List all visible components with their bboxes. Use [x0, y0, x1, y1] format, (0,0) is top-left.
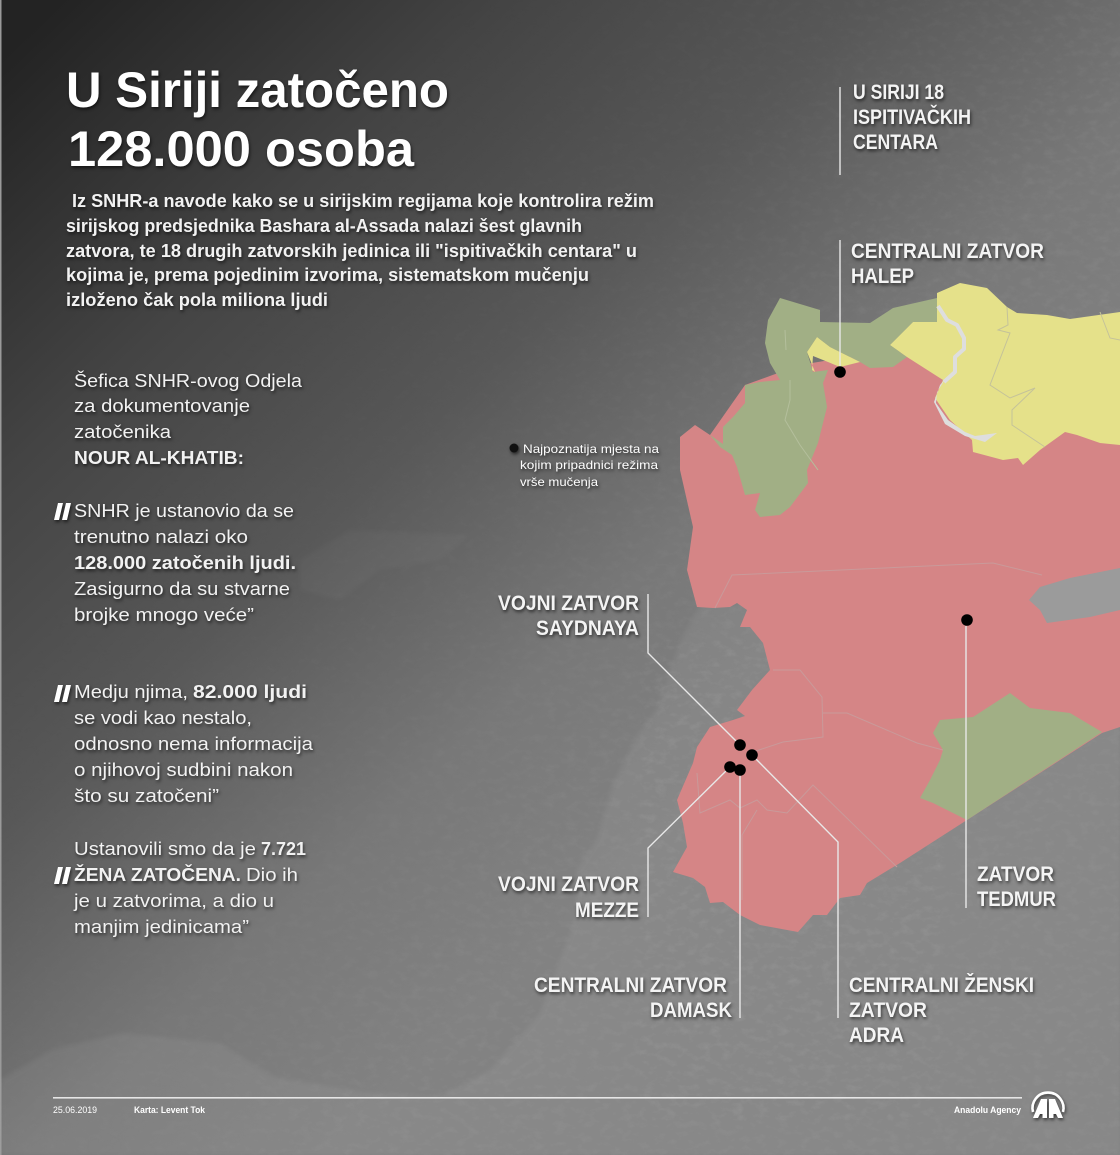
legend: marker meaning: Najpoznatija mjesta na — [523, 442, 659, 456]
footer: Karta: Levent Tok — [134, 1105, 206, 1115]
quote 2: 82.000 ljudi — [193, 681, 307, 702]
intro paragraph: zatvora, te 18 drugih zatvorskih jedinica ili "ispitivačkih centara" u — [66, 240, 637, 261]
label: Tedmur prison — [977, 863, 1056, 911]
quote 3 — [54, 838, 306, 937]
label: Saydnaya prison — [498, 592, 639, 640]
leader lines — [648, 87, 966, 1018]
label: Damascus prison: DAMASK — [650, 999, 732, 1022]
quote 2: se vodi kao nestalo, — [74, 707, 252, 728]
text: speaker introduction: NOUR AL-KHATIB: — [74, 447, 244, 468]
legend: marker meaning: vrše mučenja — [520, 475, 598, 489]
icon: prison marker pins — [724, 366, 973, 776]
quote 3: Dio ih — [246, 864, 298, 885]
quote 3: Ustanovili smo da je — [74, 838, 256, 859]
quote 1: Zasigurno da su stvarne — [74, 578, 290, 599]
text: speaker introduction: za dokumentovanje — [74, 395, 250, 416]
label: Saydnaya prison: SAYDNAYA — [536, 617, 639, 640]
label: Adra women's prison: ZATVOR — [849, 999, 927, 1022]
intro paragraph: kojima je, prema pojedinim izvorima, sistematskom mučenju — [66, 264, 589, 285]
label: interrogation centres — [853, 81, 971, 154]
label: Mezze prison: VOJNI ZATVOR — [498, 873, 639, 896]
icon: Anadolu Agency logo — [1032, 1093, 1064, 1118]
icon: quote mark — [54, 503, 71, 520]
quote 1: trenutno nalazi oko — [74, 526, 248, 547]
quote 2 — [54, 681, 314, 806]
label: Damascus prison: CENTRALNI ZATVOR — [534, 974, 727, 997]
quote 1: 128.000 zatočenih ljudi. — [74, 552, 296, 573]
quote 2: Medju njima, — [74, 681, 188, 702]
label: interrogation centres: U SIRIJI 18 — [853, 81, 944, 104]
region: Kurdish-held territory north-east — [890, 283, 1120, 465]
label: interrogation centres: ISPITIVAČKIH — [853, 105, 971, 129]
label: Tedmur prison: ZATVOR — [977, 863, 1054, 886]
label: Adra women's prison: CENTRALNI ŽENSKI — [849, 973, 1034, 997]
title — [66, 62, 449, 177]
label: Aleppo prison — [851, 240, 1044, 288]
legend: marker meaning — [510, 442, 659, 489]
label: Adra women's prison — [849, 973, 1034, 1047]
text: speaker introduction: zatočenika — [74, 421, 172, 442]
text: speaker introduction: Šefica SNHR-ovog Odjela — [74, 370, 303, 391]
region: government-held territory — [673, 352, 1120, 932]
text: speaker introduction — [74, 370, 303, 468]
province boundaries — [697, 307, 1120, 900]
quote 2: što su zatočeni” — [74, 785, 219, 806]
region: Euphrates river and lake — [934, 306, 997, 442]
quote 2: o njihovoj sudbini nakon — [74, 759, 293, 780]
quote 1 — [54, 500, 296, 625]
label: Saydnaya prison: VOJNI ZATVOR — [498, 592, 639, 615]
label: Aleppo prison: CENTRALNI ZATVOR — [851, 240, 1044, 263]
label: Adra women's prison: ADRA — [849, 1024, 904, 1047]
label: Damascus prison — [534, 974, 732, 1022]
region: eastern enclave — [920, 693, 1102, 820]
quote 3: 7.721 — [261, 838, 306, 859]
footer — [53, 1093, 1064, 1118]
label: Aleppo prison: HALEP — [851, 265, 914, 288]
quote 1: brojke mnogo veće” — [74, 604, 254, 625]
region: salt lake — [1029, 568, 1120, 623]
icon: quote mark — [54, 867, 71, 884]
intro paragraph: izloženo čak pola miliona ljudi — [66, 289, 328, 310]
map of Syria — [673, 283, 1120, 932]
label: interrogation centres: CENTARA — [853, 131, 938, 154]
footer: 25.06.2019 — [53, 1105, 97, 1115]
region: Kurdish-held enclave — [807, 337, 860, 372]
quote 3: ŽENA ZATOČENA. — [74, 864, 241, 885]
legend: marker meaning: kojim pripadnici režima — [520, 458, 658, 472]
region: rebel-held territory north-west — [710, 298, 940, 517]
label: Tedmur prison: TEDMUR — [977, 888, 1056, 911]
quote 3: manjim jedinicama” — [74, 916, 249, 937]
title: U Siriji zatočeno — [66, 62, 449, 118]
intro paragraph: Iz SNHR-a navode kako se u sirijskim regijama koje kontrolira režim — [72, 190, 654, 211]
footer: Anadolu Agency — [954, 1105, 1021, 1115]
intro paragraph: sirijskog predsjednika Bashara al-Assada nalazi šest glavnih — [66, 215, 582, 236]
icon: quote mark — [54, 685, 71, 702]
quote 1: SNHR je ustanovio da se — [74, 500, 294, 521]
intro paragraph — [66, 190, 654, 310]
title: 128.000 osoba — [68, 121, 415, 177]
icon: legend dot — [510, 444, 518, 452]
label: Mezze prison — [498, 873, 639, 922]
quote 3: je u zatvorima, a dio u — [73, 890, 274, 911]
quote 2: odnosno nema informacija — [74, 733, 314, 754]
label: Mezze prison: MEZZE — [575, 899, 639, 922]
